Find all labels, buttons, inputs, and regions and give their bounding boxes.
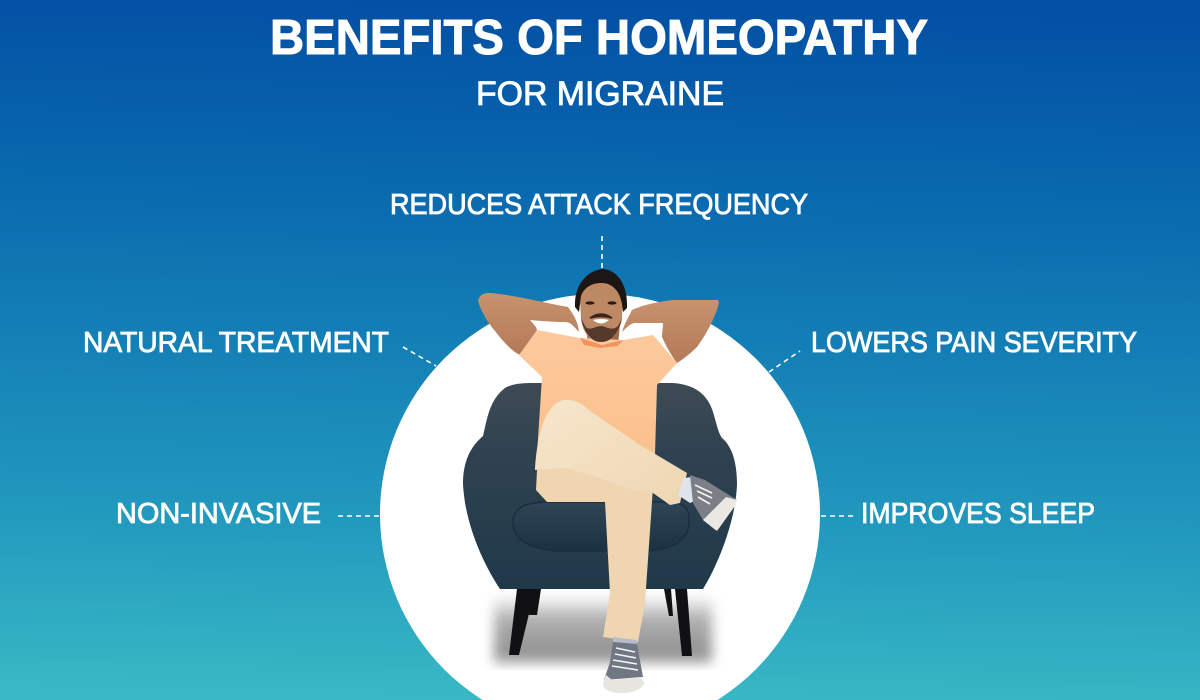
title: BENEFITS OF HOMEOPATHY [270,11,928,65]
beard [581,318,622,342]
label: improves sleep: IMPROVES SLEEP [861,498,1095,530]
shirt [519,330,677,470]
neck [586,325,620,345]
chair cushion [513,502,689,551]
raised shoe laces [695,485,712,504]
right arm [622,300,719,363]
subtitle: FOR MIGRAINE [476,75,724,113]
left arm [478,293,579,355]
illustration: man relaxing in armchair [463,269,737,693]
connector: lower left [338,515,380,517]
armchair body [463,383,737,589]
smile [593,319,609,324]
label: lowers pain severity: LOWERS PAIN SEVERITY [811,327,1137,359]
shirt collar [580,338,623,348]
lower shoe laces [612,648,638,670]
moustache [590,314,612,318]
hair [575,269,627,312]
eyes [586,301,616,305]
white circle [380,294,820,700]
label: natural treatment: NATURAL TREATMENT [83,327,389,359]
chair legs [509,589,692,656]
raised foot sock [678,477,697,503]
label: reduces attack frequency: REDUCES ATTACK FREQUENCY [390,189,808,221]
connector: upper left [403,347,436,366]
raised shoe sole [703,497,737,531]
lower shoe sole [603,675,644,693]
label: non-invasive: NON-INVASIVE [116,498,321,530]
crossed leg trousers [535,400,687,505]
lower shoe [604,642,643,680]
lower sock [613,637,637,648]
connector: upper right [769,351,800,372]
connector: lower right [821,515,855,517]
head [580,278,623,342]
lower leg trousers [536,455,653,642]
floor shadow [494,595,712,663]
connector: top [601,236,603,269]
raised shoe [690,475,737,530]
